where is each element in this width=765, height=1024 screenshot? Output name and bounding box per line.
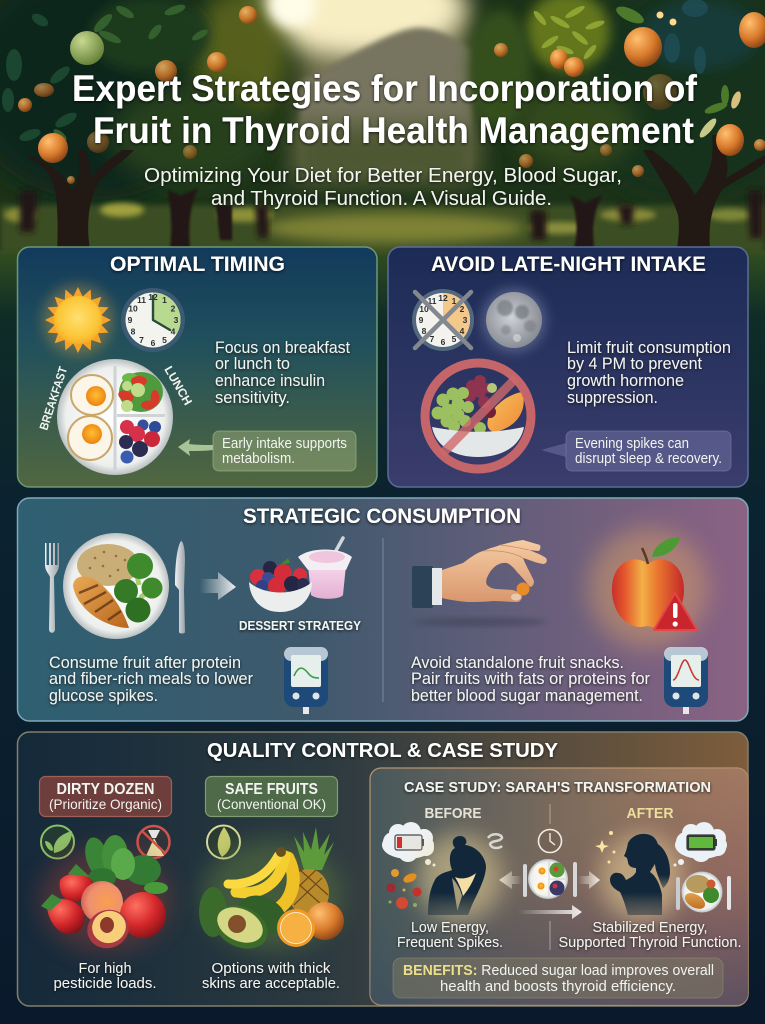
text: limit fruit consumption: by 4 PM to prevent: [567, 354, 702, 373]
text: avoid standalone fruit snacks: Avoid standalone fruit snacks.: [411, 653, 624, 672]
icon: crossed-out clock: 8: [422, 326, 427, 336]
arrow: right to after: [578, 871, 600, 889]
badge: safe fruits: SAFE FRUITS: [225, 781, 318, 798]
text: focus on breakfast: or lunch to: [215, 354, 290, 373]
label: after: AFTER: [626, 805, 674, 822]
icon: organic leaf: [41, 826, 74, 858]
badge: safe fruits: [206, 776, 338, 816]
icon: clock with morning hours highlighted: 4: [171, 326, 176, 336]
text: limit fruit consumption: growth hormone: [567, 371, 684, 390]
text: consume fruit after protein: and fiber-rich meals to lower: [49, 669, 253, 688]
icon: crossed-out clock: 4: [460, 326, 465, 336]
icon: apple with warning: [588, 528, 708, 648]
text: stabilized energy: Supported Thyroid Function.: [558, 934, 742, 951]
icon: clock with morning hours highlighted: 5: [162, 335, 167, 345]
text: focus on breakfast: sensitivity.: [215, 388, 290, 407]
illustration: safe fruits: [199, 827, 344, 957]
icon: clock with morning hours highlighted: 10: [128, 304, 138, 314]
icon: scattered fruit: [386, 869, 422, 909]
icon: crossed-out clock: 9: [419, 315, 424, 325]
text: options with thick skins: skins are acceptable.: [202, 975, 340, 992]
icon: berry bowl: [249, 558, 312, 612]
text: consume fruit after protein: glucose spikes.: [49, 686, 158, 705]
icon: clock with morning hours highlighted: 9: [128, 315, 133, 325]
icon: sparkles: [595, 831, 616, 864]
icon: timing clock: [538, 830, 562, 852]
icon: meal plate with chicken and broccoli: [63, 533, 169, 639]
icon: crossed-out clock: 2: [460, 304, 465, 314]
icon: low battery cloud: [382, 822, 436, 866]
title: Expert Strategies for Incorporation of: [72, 68, 698, 109]
orchard fruits: [18, 6, 765, 184]
illustration: dirty dozen fruit: [39, 835, 171, 954]
text: focus on breakfast: enhance insulin: [215, 371, 325, 390]
text: stabilized energy: [558, 919, 742, 951]
callout: evening spikes: [541, 431, 731, 471]
panel: quality control and case study: [18, 732, 748, 1006]
icon: crossed-out clock: 7: [430, 334, 435, 344]
icon: clock with morning hours highlighted: 2: [171, 304, 176, 314]
panel: avoid late-night intake: [388, 247, 748, 487]
badge: dirty dozen: DIRTY DOZEN: [56, 781, 154, 798]
icon: clock with morning hours highlighted: 11: [137, 295, 146, 305]
arrow: left to before: [499, 871, 522, 889]
text: consume fruit after protein: [49, 653, 253, 705]
divider: [549, 804, 551, 950]
icon: sun: [42, 284, 114, 356]
illustration: energized woman silhouette: [600, 834, 684, 922]
icon: crossed-out clock: 5: [452, 334, 457, 344]
icon: hand pinching fruit: [412, 540, 547, 626]
callout: evening spikes: Evening spikes can: [575, 436, 689, 452]
icon: clock with morning hours highlighted: 1: [162, 295, 167, 305]
icon: forbidden fruit bowl: [425, 363, 531, 469]
icon: crossed-out clock: 3: [463, 315, 468, 325]
icon: clock with morning hours highlighted: [121, 288, 185, 352]
callout: early intake: metabolism.: [222, 451, 295, 467]
text: for high pesticide loads: [54, 960, 156, 992]
text: avoid standalone fruit snacks: better blood sugar management.: [411, 686, 643, 705]
icon: moon: [482, 288, 546, 352]
panel: optimal timing: [18, 247, 377, 487]
icon: healthy meal plate: [676, 872, 731, 912]
text: consume fruit after protein: Consume fruit after protein: [49, 653, 241, 672]
label: breakfast: BREAKFAST: [37, 364, 70, 432]
label: before: BEFORE: [424, 805, 482, 822]
label: dessert strategy: DESSERT STRATEGY: [239, 619, 362, 633]
title: Fruit in Thyroid Health Management: [93, 110, 694, 151]
subtitle: [144, 164, 622, 210]
icon: crossed-out clock: 10: [419, 304, 429, 314]
arrow: callout to plate: [178, 439, 213, 456]
text: avoid standalone fruit snacks: Pair fruits with fats or proteins for: [411, 669, 650, 688]
badge: dirty dozen: [40, 776, 172, 816]
text: for high pesticide loads: For high: [78, 960, 132, 977]
icon: clock with morning hours highlighted: 6: [151, 338, 156, 348]
label: lunch: LUNCH: [161, 364, 195, 408]
icon: no pesticide spray: [138, 826, 170, 858]
text: limit fruit consumption: [567, 338, 731, 407]
title: [72, 68, 698, 151]
panel: strategic consumption: [18, 498, 748, 721]
divider: [382, 538, 384, 702]
arrow: meal to dessert: [200, 572, 236, 600]
text: options with thick skins: Options with thick: [212, 960, 331, 977]
badge: dirty dozen: (Prioritize Organic): [49, 796, 162, 812]
icon: knife: [175, 541, 185, 634]
icon: balanced plate: [523, 859, 577, 899]
icon: dizzy swirl: [488, 834, 502, 848]
callout: benefits: [393, 958, 723, 998]
subtitle: and Thyroid Function. A Visual Guide.: [211, 187, 552, 210]
text: stabilized energy: Stabilized Energy,: [592, 919, 708, 936]
icon: clock with morning hours highlighted: 7: [139, 335, 144, 345]
callout: evening spikes: disrupt sleep & recovery.: [575, 451, 722, 467]
text: limit fruit consumption: Limit fruit consumption: [567, 338, 731, 357]
arrow: progress: [518, 905, 582, 919]
heading: optimal timing: OPTIMAL TIMING: [110, 252, 285, 276]
icon: yogurt cup: [298, 538, 352, 599]
icon: crossed-out clock: 11: [428, 296, 437, 306]
text: for high pesticide loads: pesticide loads.: [54, 975, 156, 992]
icon: clock with morning hours highlighted: 12: [148, 292, 158, 302]
icon: clock with morning hours highlighted: 3: [174, 315, 179, 325]
heading: avoid late-night intake: AVOID LATE-NIGHT INTAKE: [431, 252, 706, 276]
text: low energy: Frequent Spikes.: [397, 934, 503, 951]
icon: fork: [45, 543, 59, 633]
badge: safe fruits: (Conventional OK): [217, 796, 326, 812]
icon: glucose meter, gentle curve: [284, 647, 328, 714]
text: options with thick skins: [202, 960, 340, 992]
text: low energy: [397, 919, 503, 951]
icon: glucose meter, sharp spike: [664, 647, 708, 714]
icon: breakfast and lunch plate: [57, 359, 173, 475]
icon: crossed-out clock: 1: [452, 296, 457, 306]
callout: early intake: Early intake supports: [222, 436, 347, 452]
heading: case study: CASE STUDY: SARAH'S TRANSFORMATION: [404, 779, 711, 796]
illustration: tired woman silhouette: [418, 834, 502, 922]
icon: crossed-out clock: 6: [441, 337, 446, 347]
callout: benefits: health and boosts thyroid efficiency.: [440, 979, 676, 995]
text: low energy: Low Energy,: [411, 919, 489, 936]
orchard scene background: [0, 0, 765, 253]
icon: thick skin: [207, 826, 240, 858]
icon: crossed-out clock: [412, 289, 474, 351]
text: avoid standalone fruit snacks: [411, 653, 650, 705]
icon: full battery cloud: [674, 822, 727, 866]
subtitle: Optimizing Your Diet for Better Energy, Blood Sugar,: [144, 164, 622, 187]
heading: strategic consumption: STRATEGIC CONSUMPTION: [243, 504, 521, 528]
icon: clock with morning hours highlighted: 8: [131, 326, 136, 336]
text: focus on breakfast: Focus on breakfast: [215, 338, 350, 357]
icon: crossed-out clock: 12: [438, 293, 448, 303]
heading: quality control and case study: QUALITY CONTROL & CASE STUDY: [207, 739, 558, 762]
text: limit fruit consumption: suppression.: [567, 388, 658, 407]
foliage leaves: [2, 0, 743, 143]
callout: benefits: BENEFITS: Reduced sugar load improves overall: [403, 963, 714, 979]
panel: case study: [370, 768, 748, 1005]
callout: early intake: [213, 431, 356, 471]
text: focus on breakfast: [215, 338, 350, 407]
tree trunks: [20, 135, 765, 250]
